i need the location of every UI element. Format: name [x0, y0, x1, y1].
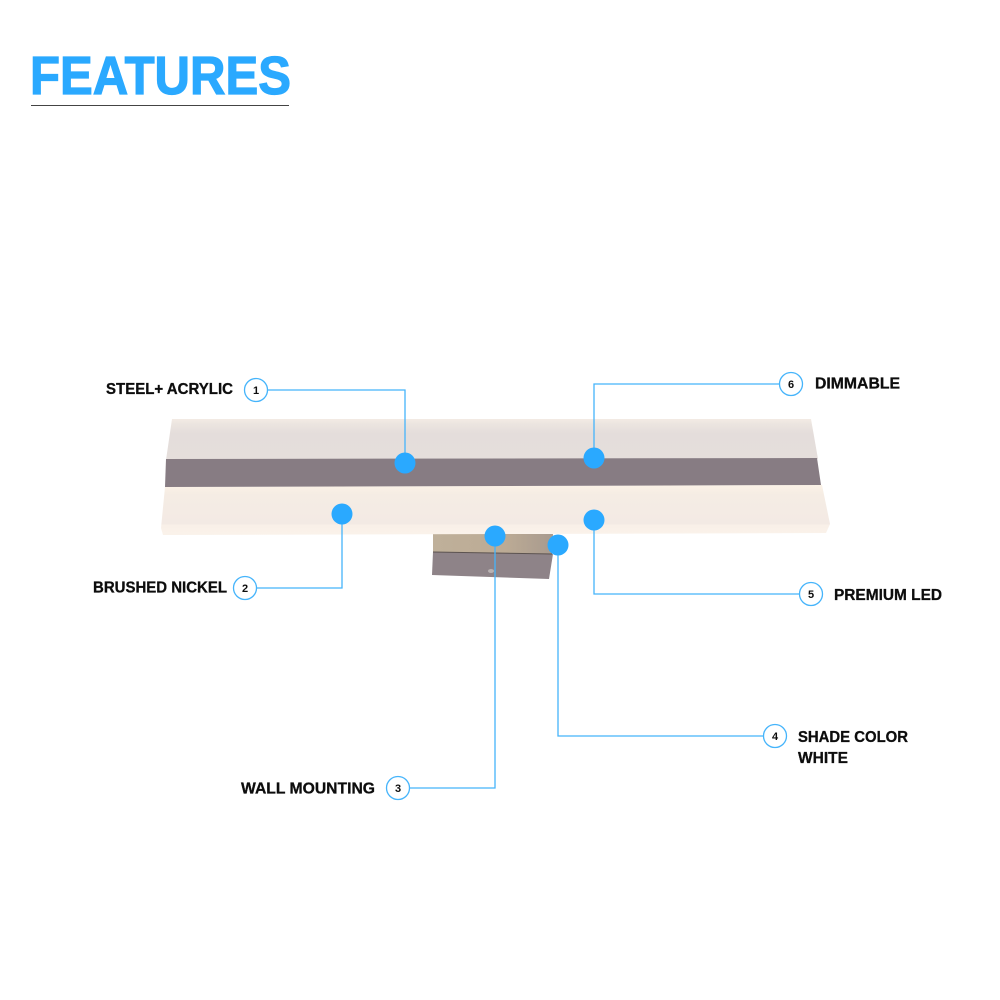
callout 3: wall mounting: WALL MOUNTING	[241, 780, 375, 798]
callout 2: brushed nickel	[93, 504, 352, 600]
callout 1: steel + acrylic: 1	[253, 385, 259, 397]
callout 6: dimmable	[584, 372, 900, 468]
lamp nickel band	[165, 458, 821, 487]
callout 3: wall mounting	[241, 526, 506, 800]
callout 4: shade color white: 4	[772, 731, 779, 743]
callout 5: premium led: 5	[808, 589, 814, 601]
callout 4: shade color white: WHITE	[798, 750, 848, 767]
callout 5: premium led	[584, 510, 942, 606]
callout 1: steel + acrylic: STEEL+ ACRYLIC	[106, 381, 233, 398]
callout 5: premium led: PREMIUM LED	[834, 587, 942, 604]
callout 2: brushed nickel: BRUSHED NICKEL	[93, 580, 227, 596]
callout 4: shade color white: SHADE COLOR	[798, 729, 908, 746]
lamp upper acrylic panel	[166, 419, 818, 460]
lamp wall mount base	[432, 534, 553, 579]
callout 4: shade color white	[548, 534, 908, 767]
lamp lower acrylic panel	[161, 485, 830, 535]
title underline	[31, 105, 289, 106]
callout 1: steel + acrylic	[106, 378, 416, 474]
title: FEATURES	[30, 46, 291, 106]
callout 6: dimmable: DIMMABLE	[815, 376, 900, 392]
callout 3: wall mounting: 3	[395, 783, 401, 795]
product: wall light	[161, 419, 830, 579]
callout 2: brushed nickel: 2	[242, 583, 248, 595]
callout 6: dimmable: 6	[788, 379, 794, 391]
